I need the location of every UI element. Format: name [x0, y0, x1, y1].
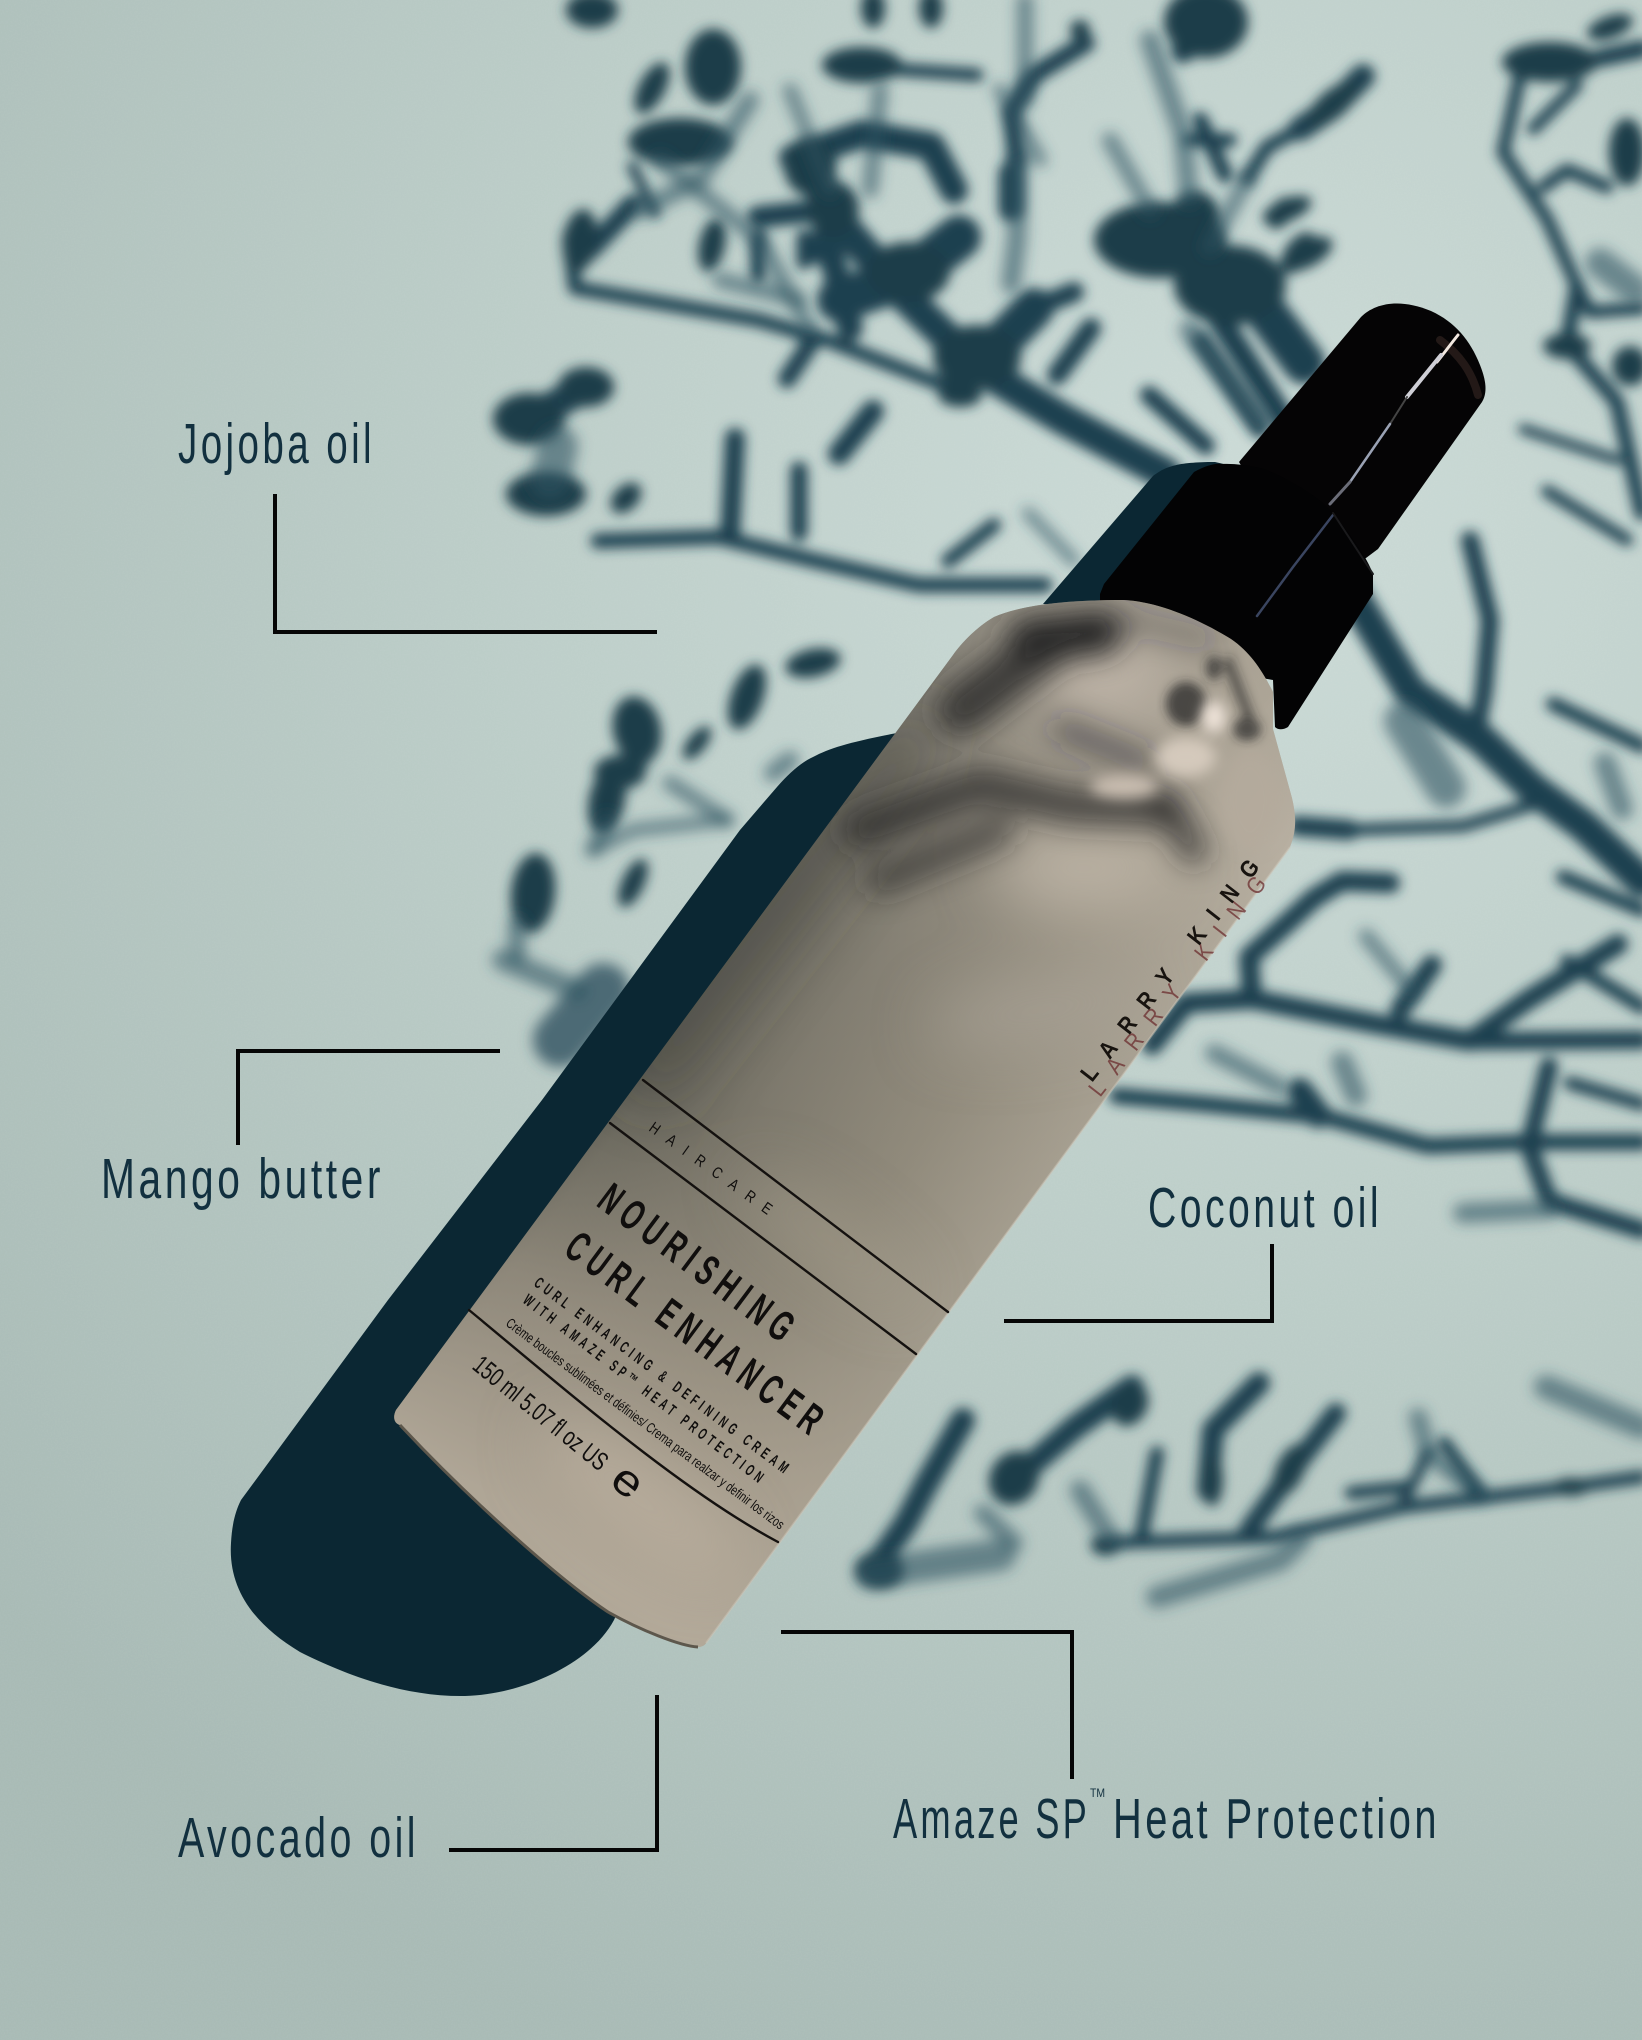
callout: Jojoba oil [178, 412, 657, 632]
label: Jojoba oil [178, 412, 375, 476]
bottle cast shadow [231, 462, 1250, 1696]
estimated sign: e [602, 1453, 654, 1509]
haircare: HAIRCARE [646, 1119, 784, 1225]
label: Mango butter [101, 1147, 384, 1211]
callout: Coconut oil [1004, 1176, 1382, 1321]
product description line 2: WITH AMAZE SP™ HEAT PROTECTION [520, 1292, 770, 1489]
bottle bottom rim [400, 1425, 698, 1647]
callout: Amaze SP Heat Protection [781, 1632, 1440, 1851]
product name line 1: NOURISHING [589, 1175, 809, 1356]
cap top [1239, 303, 1486, 570]
label: Coconut oil [1148, 1176, 1382, 1240]
label start: Amaze SP [893, 1787, 1090, 1851]
leader line [1004, 1244, 1272, 1321]
product name line 2: CURL ENHANCER [556, 1222, 838, 1448]
cap highlights [1257, 335, 1478, 616]
bottle label text [467, 1119, 838, 1532]
bottle right rim [706, 847, 1290, 1643]
bottle lighting [564, 634, 1172, 1542]
brand name print: LARRY KING [1075, 842, 1275, 1087]
cap collar [1100, 464, 1373, 729]
leader line [238, 1051, 500, 1145]
trademark: TM [1090, 1786, 1105, 1800]
label: Avocado oil [178, 1806, 419, 1870]
shoulder highlights [1084, 694, 1234, 808]
brand name ghost print: LARRY KING [1083, 858, 1282, 1102]
bottle body [394, 600, 1295, 1647]
callout: Avocado oil [178, 1695, 657, 1870]
translated description: Crème boucles sublimées et définies/ Crema para realzar y definir los rizos [503, 1315, 788, 1532]
leader line [449, 1695, 657, 1850]
volume: 150 ml 5.07 fl oz US [467, 1349, 614, 1477]
brand name [1075, 842, 1282, 1102]
shadows falling on bottle shoulder [860, 615, 1210, 880]
foliage shadow: strong branches and leaves [493, 0, 1642, 1588]
callout: Mango butter [101, 1051, 500, 1211]
leader line [275, 494, 657, 632]
foliage shadow: faint branches [503, 0, 1642, 1597]
product description line 1: CURL ENHANCING & DEFINING CREAM [531, 1275, 795, 1480]
bottle spray cap [1100, 303, 1486, 729]
bottle label lines [469, 1080, 948, 1542]
leader line [781, 1632, 1072, 1779]
label end: Heat Protection [1113, 1787, 1440, 1851]
